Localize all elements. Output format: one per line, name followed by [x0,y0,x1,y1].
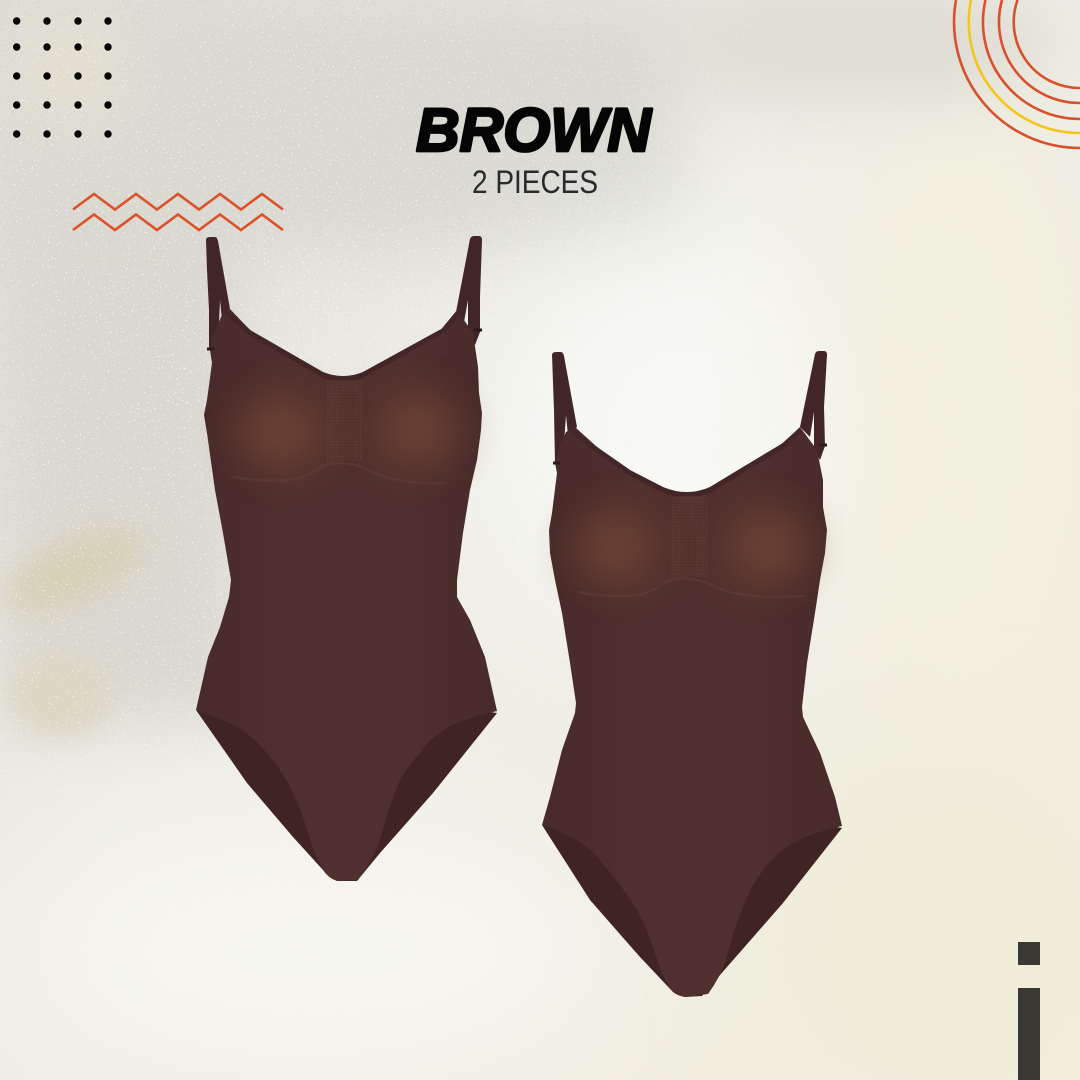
body [196,308,497,881]
right strap [456,236,482,345]
underbust seam [578,579,805,597]
left strap [552,352,577,466]
title: BROWN: BROWN [416,96,653,164]
bodysuit: left garment [196,236,497,881]
neckline band [572,430,801,495]
body [542,427,842,997]
inner lining [196,690,497,881]
right strap [800,351,827,460]
centre mesh panel [670,496,708,580]
neckline band [226,312,458,379]
subtitle: 2 PIECES: 2 PIECES [472,164,598,200]
inner lining [542,800,842,997]
cup highlights [238,396,322,468]
adjusters [207,330,482,349]
centre mesh panel [327,380,362,464]
adjusters [553,445,827,463]
underbust seam [233,463,447,483]
bodysuit: right garment [542,351,842,997]
cup highlights [575,511,655,583]
dot grid decoration [13,17,112,138]
corner "i" mark [1018,942,1040,1080]
left strap [206,237,230,352]
concentric arcs decoration [954,0,1080,148]
zigzag decoration [73,194,283,230]
